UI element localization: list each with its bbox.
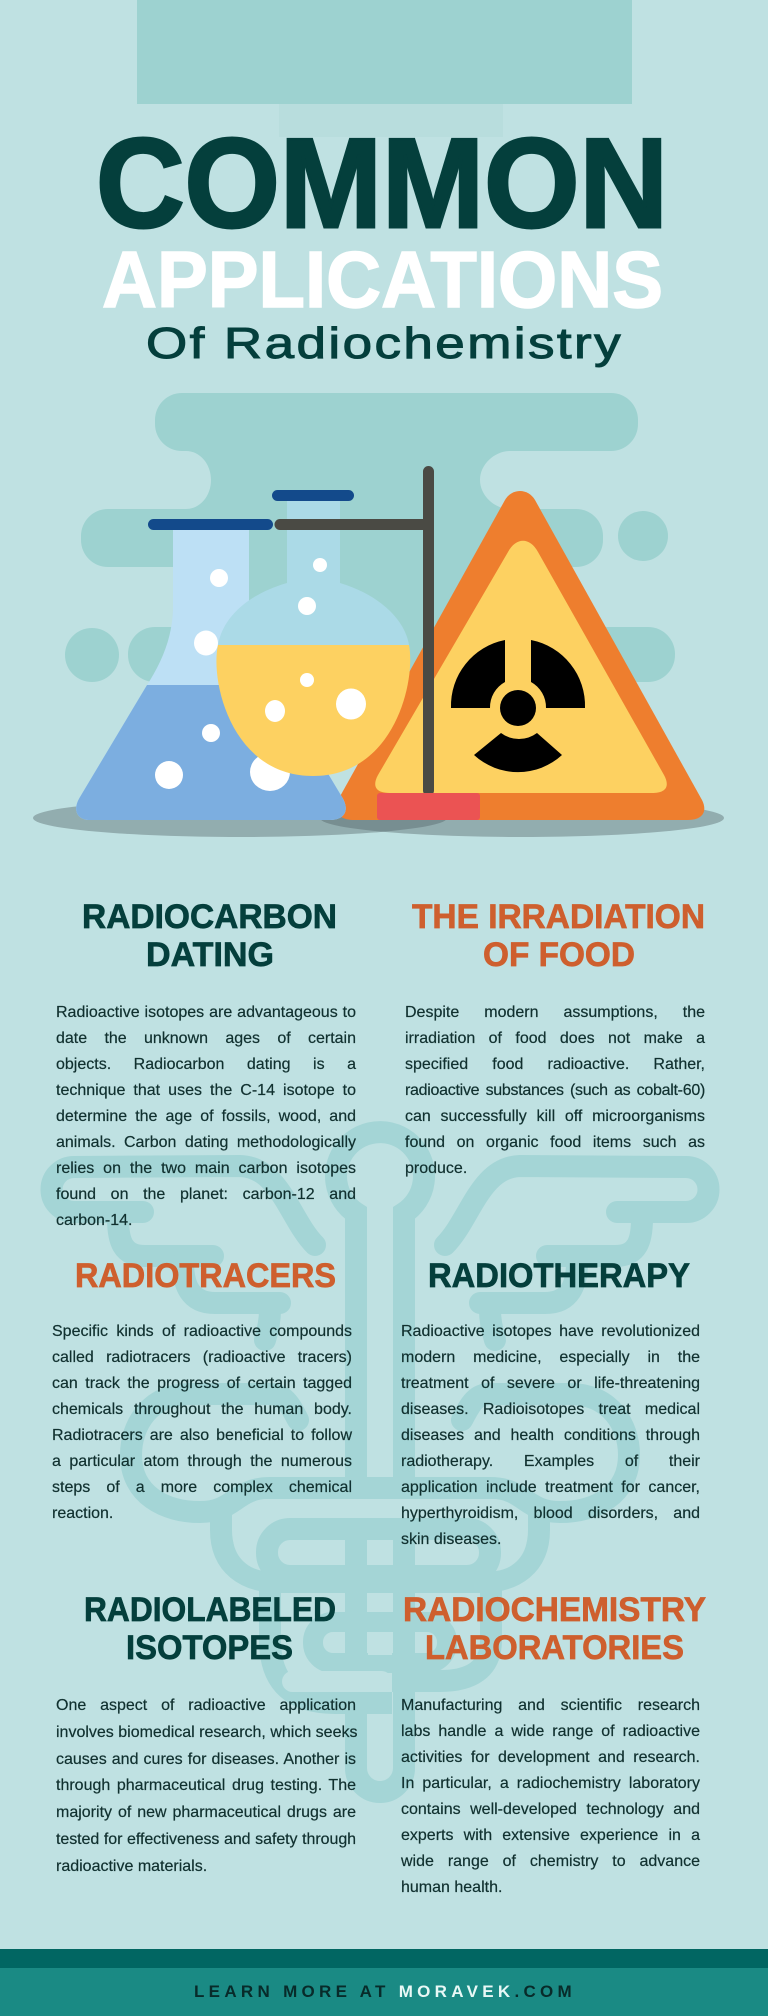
text: radiochemistry laboratories: In particular, a radiochemistry laboratory bbox=[401, 1775, 700, 1792]
section headings: RADIOTRACERS bbox=[75, 1257, 336, 1295]
text: radiotherapy: diseases and health conditions through bbox=[401, 1427, 700, 1444]
text: radiotherapy: treatment of severe or life-threatening bbox=[401, 1375, 700, 1392]
text: radiolabeled isotopes: involves biomedical research, which seeks bbox=[56, 1724, 357, 1741]
text: radiotracers: steps of a more complex chemical bbox=[52, 1479, 352, 1496]
text: radiocarbon dating bbox=[56, 1004, 356, 1229]
text: radiotherapy: radiotherapy. Examples of their bbox=[401, 1453, 700, 1470]
section headings: RADIOCARBON bbox=[82, 898, 337, 936]
text: radiochemistry laboratories: labs handle a wide range of radioactive bbox=[401, 1723, 700, 1740]
text: radiocarbon dating: animals. Carbon dating methodologically bbox=[56, 1134, 356, 1151]
text: radiotherapy bbox=[401, 1323, 700, 1548]
section headings: ISOTOPES bbox=[126, 1629, 293, 1667]
text: irradiation of food: specified food radioactive. Rather, bbox=[405, 1056, 705, 1073]
round flask bbox=[216, 490, 410, 776]
text: radiocarbon dating: date the unknown ages of certain bbox=[56, 1030, 356, 1047]
text: radiotracers: Radiotracers are also beneficial to follow bbox=[52, 1427, 352, 1444]
text: radiolabeled isotopes: causes and cures for diseases. Another is bbox=[56, 1751, 356, 1768]
text: radiocarbon dating: technique that uses the C-14 isotope to bbox=[56, 1082, 356, 1099]
footer call to action: LEARN MORE AT MORAVEK.COM bbox=[194, 1982, 576, 2001]
text: radiotherapy: Radioactive isotopes have revolutionized bbox=[401, 1323, 700, 1340]
text: radiotherapy: modern medicine, especially in the bbox=[401, 1349, 700, 1366]
text: radiotherapy: diseases. Radioisotopes treat medical bbox=[401, 1401, 700, 1418]
text: radiochemistry laboratories: wide range of chemistry to advance bbox=[401, 1853, 700, 1870]
text: radiocarbon dating: relies on the two main carbon isotopes bbox=[56, 1160, 356, 1177]
text: irradiation of food: produce. bbox=[405, 1160, 467, 1177]
lab stand bbox=[274, 466, 480, 820]
caduceus watermark bbox=[52, 1132, 708, 1792]
text: irradiation of food: radioactive substances (such as cobalt-60) bbox=[405, 1082, 705, 1099]
title: APPLICATIONS bbox=[102, 235, 663, 324]
text: radiotracers: reaction. bbox=[52, 1505, 113, 1522]
text: radiotracers: can track the progress of certain tagged bbox=[52, 1375, 352, 1392]
text: radiocarbon dating: objects. Radiocarbon dating is a bbox=[56, 1056, 356, 1073]
text: irradiation of food bbox=[405, 1004, 706, 1177]
text: radiolabeled isotopes: One aspect of radioactive application bbox=[56, 1697, 356, 1714]
section headings bbox=[75, 898, 706, 1667]
text: radiocarbon dating: carbon-14. bbox=[56, 1212, 132, 1229]
text: radiochemistry laboratories: experts with extensive experience in a bbox=[401, 1827, 700, 1844]
warning triangle with radiation symbol bbox=[336, 491, 704, 820]
text: radiocarbon dating: found on the planet: carbon-12 and bbox=[56, 1186, 356, 1203]
text: radiolabeled isotopes: tested for effectiveness and safety through bbox=[56, 1831, 356, 1848]
conical flask bbox=[76, 519, 346, 820]
section headings: LABORATORIES bbox=[425, 1629, 684, 1667]
text: radiocarbon dating: determine the age of fossils, wood, and bbox=[56, 1108, 356, 1125]
text: irradiation of food: found on organic food items such as bbox=[405, 1134, 705, 1151]
text: radiotracers: a particular atom through the numerous bbox=[52, 1453, 352, 1470]
text: radiotherapy: application include treatment for cancer, bbox=[401, 1479, 700, 1496]
illustration background blob bbox=[65, 393, 675, 682]
title: Of Radiochemistry bbox=[146, 319, 623, 368]
text: irradiation of food: can successfully kill off microorganisms bbox=[405, 1108, 705, 1125]
text: radiotracers: chemicals throughout the human body. bbox=[52, 1401, 352, 1418]
text: radiochemistry laboratories: human health. bbox=[401, 1879, 502, 1896]
text: radiotracers bbox=[52, 1323, 352, 1522]
ground shadow bbox=[33, 799, 724, 837]
text: radiochemistry laboratories bbox=[400, 1697, 700, 1896]
text: irradiation of food: irradiation of food does not make a bbox=[405, 1030, 705, 1047]
title: COMMON bbox=[96, 112, 668, 254]
text: radiocarbon dating: Radioactive isotopes are advantageous to bbox=[56, 1004, 356, 1021]
text: radiochemistry laboratories: contains well-developed technology and bbox=[401, 1801, 700, 1818]
text: radiolabeled isotopes bbox=[56, 1697, 357, 1875]
section headings: DATING bbox=[146, 936, 274, 974]
section headings: RADIOTHERAPY bbox=[428, 1257, 690, 1295]
section headings: RADIOCHEMISTRY bbox=[403, 1591, 706, 1629]
section headings: THE IRRADIATION bbox=[412, 898, 705, 936]
text: radiotracers: Specific kinds of radioactive compounds bbox=[52, 1323, 352, 1340]
text: radiolabeled isotopes: radioactive materials. bbox=[56, 1858, 207, 1875]
text: radiochemistry laboratories: Manufacturing and scientific research bbox=[401, 1697, 700, 1714]
text: radiotherapy: hyperthyroidism, blood disorders, and bbox=[401, 1505, 700, 1522]
text: radiochemistry laboratories: activities for development and research. bbox=[401, 1749, 700, 1766]
section headings: RADIOLABELED bbox=[84, 1591, 336, 1629]
top banner block bbox=[137, 0, 632, 137]
title bbox=[96, 112, 668, 368]
footer band bbox=[0, 1949, 768, 2016]
text: radiolabeled isotopes: majority of new pharmaceutical drugs are bbox=[56, 1804, 356, 1821]
section headings: OF FOOD bbox=[483, 936, 635, 974]
text: radiolabeled isotopes: through pharmaceutical drug testing. The bbox=[56, 1777, 356, 1794]
text: radiotracers: called radiotracers (radioactive tracers) bbox=[52, 1349, 352, 1366]
text: irradiation of food: Despite modern assumptions, the bbox=[405, 1004, 705, 1021]
text: radiotherapy: skin diseases. bbox=[401, 1531, 502, 1548]
